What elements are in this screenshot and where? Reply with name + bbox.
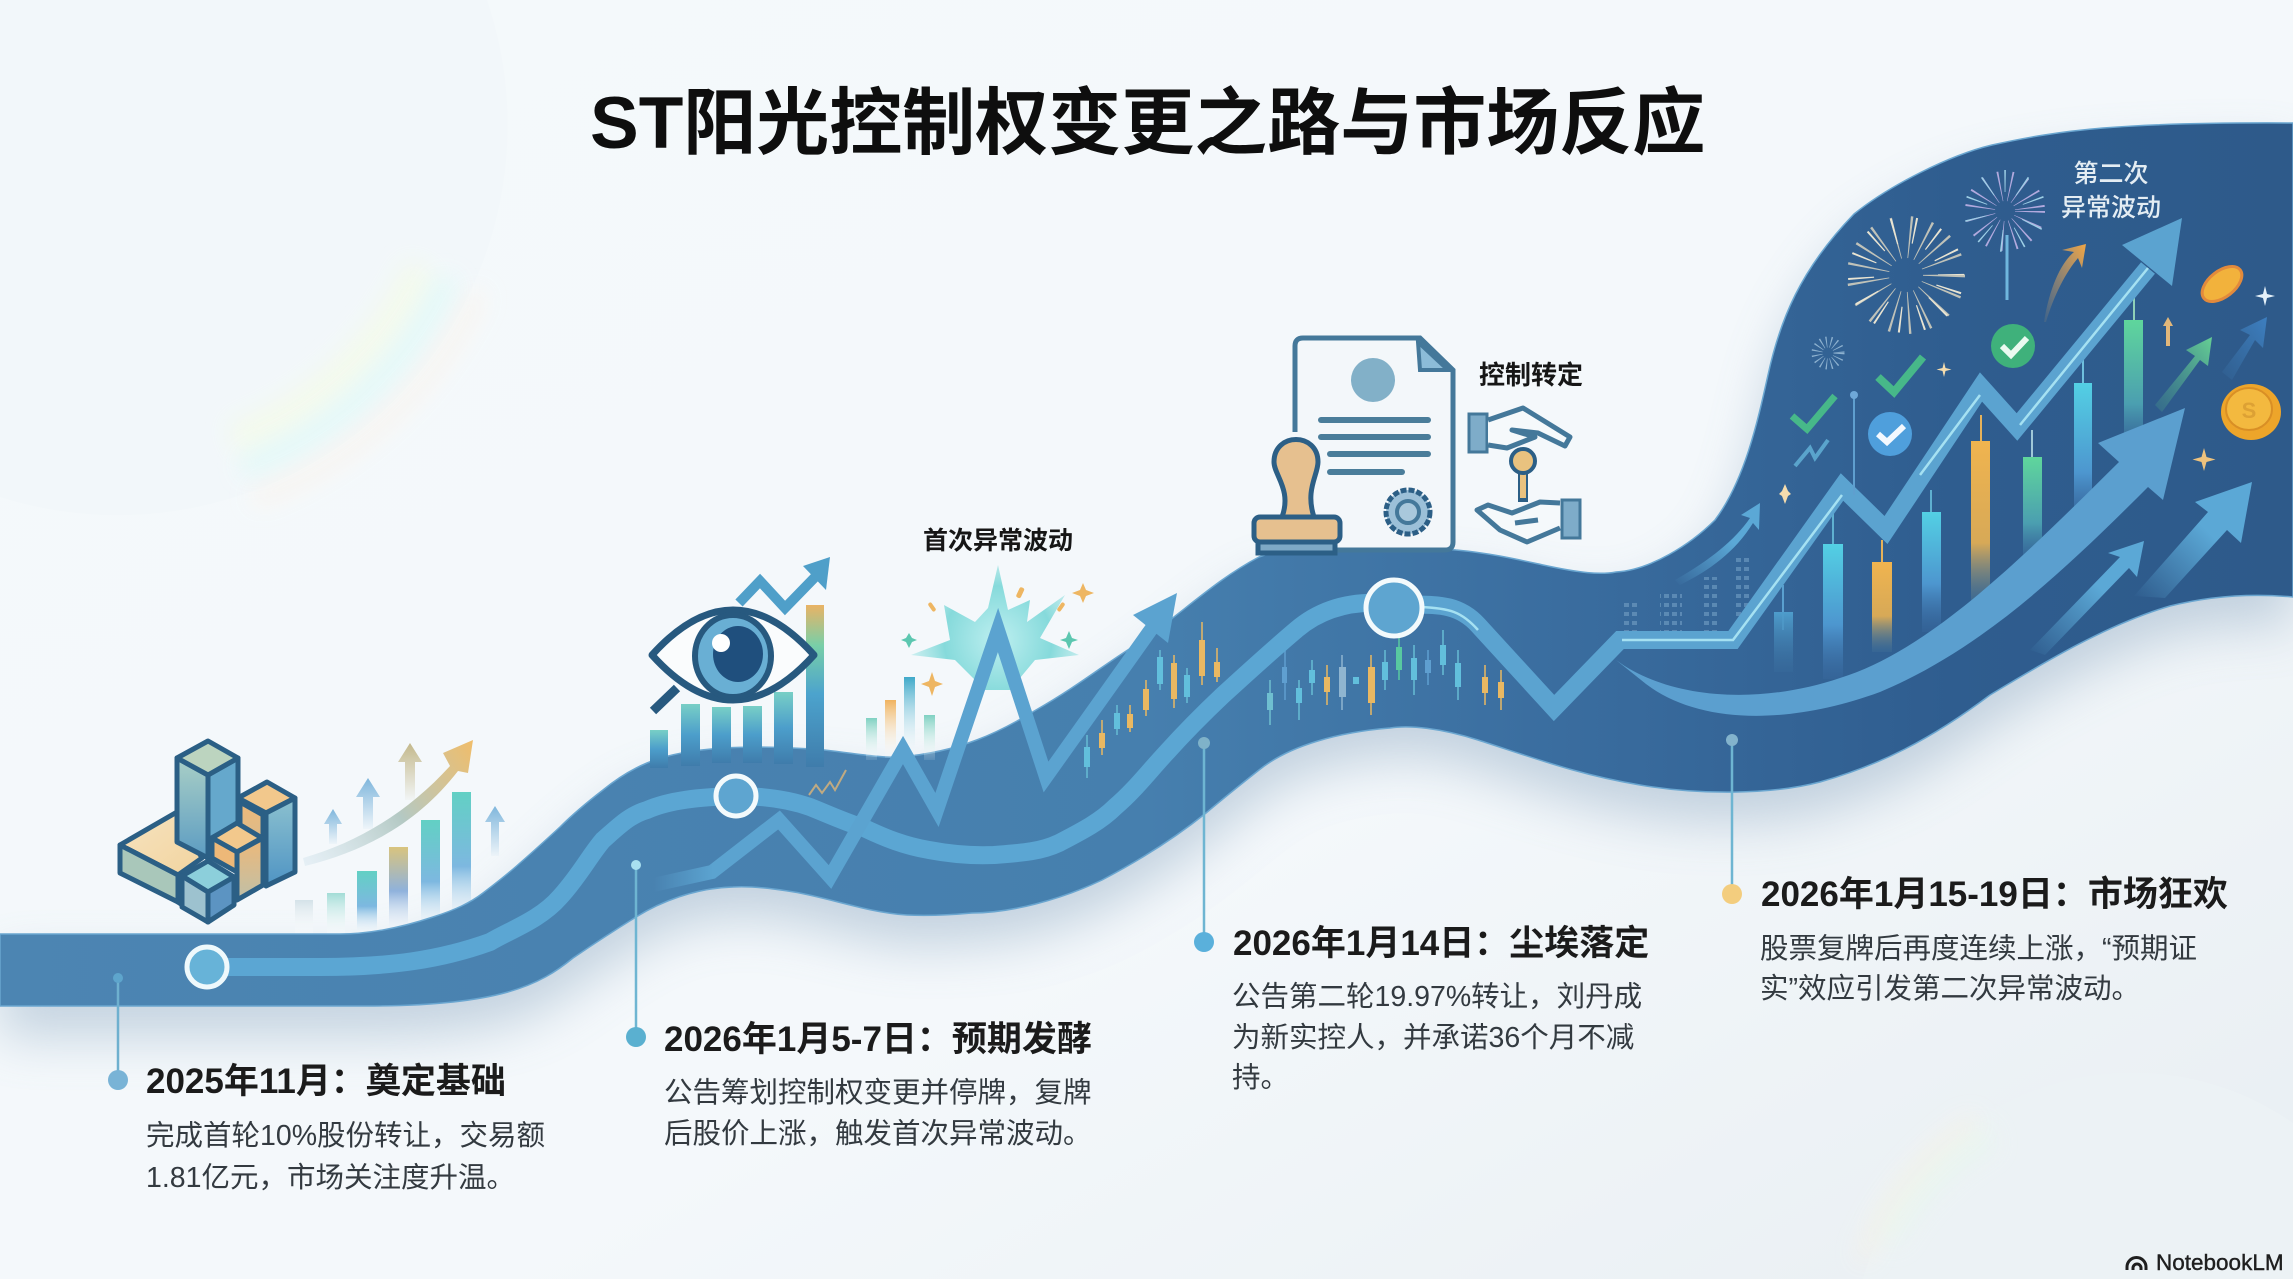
icon: document, stamp, hands and key <box>1254 338 1580 553</box>
ribbon <box>0 123 2293 1006</box>
label: second abnormal fluctuation: 异常波动 <box>2061 194 2161 222</box>
timeline node 3 <box>1366 580 1422 636</box>
milestone 2: 2026年1月5-7日: 公告筹划控制权变更并停牌，复牌 <box>664 1077 1092 1109</box>
icon: green checks <box>1792 396 1835 429</box>
coin 1 <box>2196 260 2248 308</box>
milestone 3: 2026年1月14日: 为新实控人，并承诺36个月不减 <box>1232 1022 1634 1054</box>
timeline node 2 <box>716 776 756 816</box>
icon: orange swoosh arrow <box>2044 244 2086 322</box>
milestone 2: 2026年1月5-7日 <box>626 860 1092 1150</box>
icon: dot matrix <box>1624 553 1749 632</box>
zigzag arrowhead 2 <box>2122 218 2182 286</box>
ribbon shadow <box>0 153 2293 1036</box>
milestone 1: 2025年11月: 完成首轮10%股份转让，交易额 <box>146 1120 545 1152</box>
milestone 4: 2026年1月15-19日: 股票复牌后再度连续上涨，“预期证 <box>1760 933 2197 965</box>
zigzag arrowhead 1 <box>1133 593 1177 643</box>
icon: isometric blocks <box>120 741 295 922</box>
decorative circle top left <box>0 0 508 515</box>
label: second abnormal fluctuation: 第二次 <box>2073 160 2149 188</box>
candlestick chart, right <box>1774 285 2143 679</box>
small zigzag arrow <box>1795 440 1828 466</box>
label: second abnormal fluctuation <box>2061 160 2161 222</box>
green fade arrow <box>2155 337 2212 412</box>
small candlesticks <box>1084 622 1504 778</box>
timeline node 1 <box>187 947 227 987</box>
icon: green badge check <box>1991 324 2035 368</box>
icon: firework purple <box>1975 181 2035 300</box>
icon: bar chart with arrows, milestone 1 <box>295 740 505 935</box>
label: first abnormal fluctuation: 首次异常波动 <box>923 527 1073 555</box>
milestone 4: 2026年1月15-19日: 2026年1月15-19日：市场狂欢 <box>1761 875 2228 914</box>
marker line with dot <box>1850 391 1858 495</box>
coin 2 <box>2221 384 2281 440</box>
label: control transferred: 控制转定 <box>1479 360 1583 390</box>
mini sparkline <box>809 770 846 795</box>
zigzag price line 1 <box>653 628 1152 885</box>
milestone 1: 2025年11月 <box>108 973 545 1194</box>
milestone 3: 2026年1月14日 <box>1194 737 1649 1094</box>
main timeline band <box>207 603 1394 967</box>
small rising arrow <box>1675 503 1760 585</box>
watermark: NotebookLM: NotebookLM <box>2156 1250 2284 1275</box>
milestone 4: 2026年1月15-19日: 实”效应引发第二次异常波动。 <box>1760 973 2140 1005</box>
coin 2: S <box>2242 398 2256 423</box>
milestone 1: 2025年11月: 1.81亿元，市场关注度升温。 <box>146 1162 515 1194</box>
icon: eye with bars <box>650 557 830 768</box>
milestone 2: 2026年1月5-7日: 后股价上涨，触发首次异常波动。 <box>664 1118 1092 1150</box>
secondary arrows <box>2030 482 2252 655</box>
decorative circle bottom right <box>1862 1073 2293 1279</box>
icon: firework gold <box>1861 230 1951 320</box>
title: ST阳光控制权变更之路与市场反应 <box>590 83 1705 164</box>
milestone 3: 2026年1月14日: 持。 <box>1232 1062 1289 1094</box>
icon: firework small <box>1817 342 1839 364</box>
milestone 1: 2025年11月: 2025年11月：奠定基础 <box>146 1062 506 1101</box>
milestone 3: 2026年1月14日: 2026年1月14日：尘埃落定 <box>1233 924 1649 963</box>
icon: starburst and small bars <box>866 565 1094 760</box>
milestone 3: 2026年1月14日: 公告第二轮19.97%转让，刘丹成 <box>1232 981 1642 1013</box>
milestone 4: 2026年1月15-19日 <box>1722 734 2228 1005</box>
small accents on dark ribbon <box>1675 181 2281 585</box>
sparkles <box>1779 286 2275 504</box>
milestone 2: 2026年1月5-7日: 2026年1月5-7日：预期发酵 <box>664 1020 1092 1059</box>
icon: blue badge check <box>1868 412 1912 456</box>
blue fade arrow <box>2222 317 2267 380</box>
zigzag price line 2 <box>1394 268 2148 708</box>
big curved arrow <box>1616 408 2185 716</box>
